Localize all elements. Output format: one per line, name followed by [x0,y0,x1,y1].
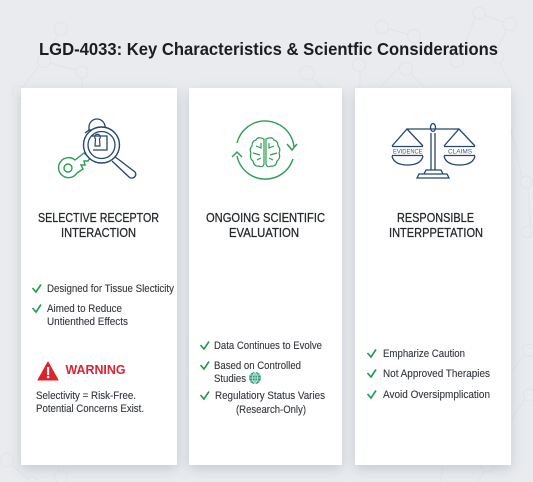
checklist: Avoid Oversipmplication [383,389,490,401]
checklist: Untienthed Effects [47,316,128,328]
icon: globe [249,372,261,384]
panel: ongoing scientific evaluation [189,88,342,465]
checklist: Regulatiory Status Varies [215,390,325,402]
checklist [368,348,490,401]
checklist: (Research-Only) [236,404,306,416]
checklist: Not Approved Therapies [383,368,490,380]
heading: INTERACTION [61,226,136,240]
heading: EVALUATION [229,226,299,240]
checklist [32,283,174,328]
icon: key and magnifier over lock [59,119,136,178]
panel: responsible interpretation [355,88,511,465]
warning callout: Potential Concerns Exist. [36,403,144,415]
heading [38,211,159,240]
panel: selective receptor interaction [21,88,177,465]
icon: balance scale [392,124,475,178]
checklist: Designed for Tissue Slecticity [47,283,174,295]
heading: INTERPPETATION [389,226,483,240]
heading [389,211,483,240]
warning callout: Selectivity = Risk-Free. [36,390,136,402]
warning callout: WARNING [66,362,126,377]
checklist: Empharize Caution [383,348,465,360]
checklist: Data Continues to Evolve [214,340,322,352]
checklist: Aimed to Reduce [47,303,122,315]
icon: warning triangle [38,362,58,380]
checklist [200,340,325,416]
heading: ONGOING SCIENTIFIC [206,211,325,225]
icon: balance scale: CLAIMS [448,148,473,156]
title: LGD-4033: Key Characteristics & Scientfic Considerations [39,39,498,59]
heading: SELECTIVE RECEPTOR [38,211,159,225]
icon: brain in cycle arrows [232,121,297,179]
heading: RESPONSIBLE [397,211,474,225]
warning callout [36,362,144,415]
checklist: Studies [214,373,246,385]
checklist: Based on Controlled [214,360,301,372]
icon: balance scale: EVIDENCE [393,148,423,156]
heading [206,211,325,240]
